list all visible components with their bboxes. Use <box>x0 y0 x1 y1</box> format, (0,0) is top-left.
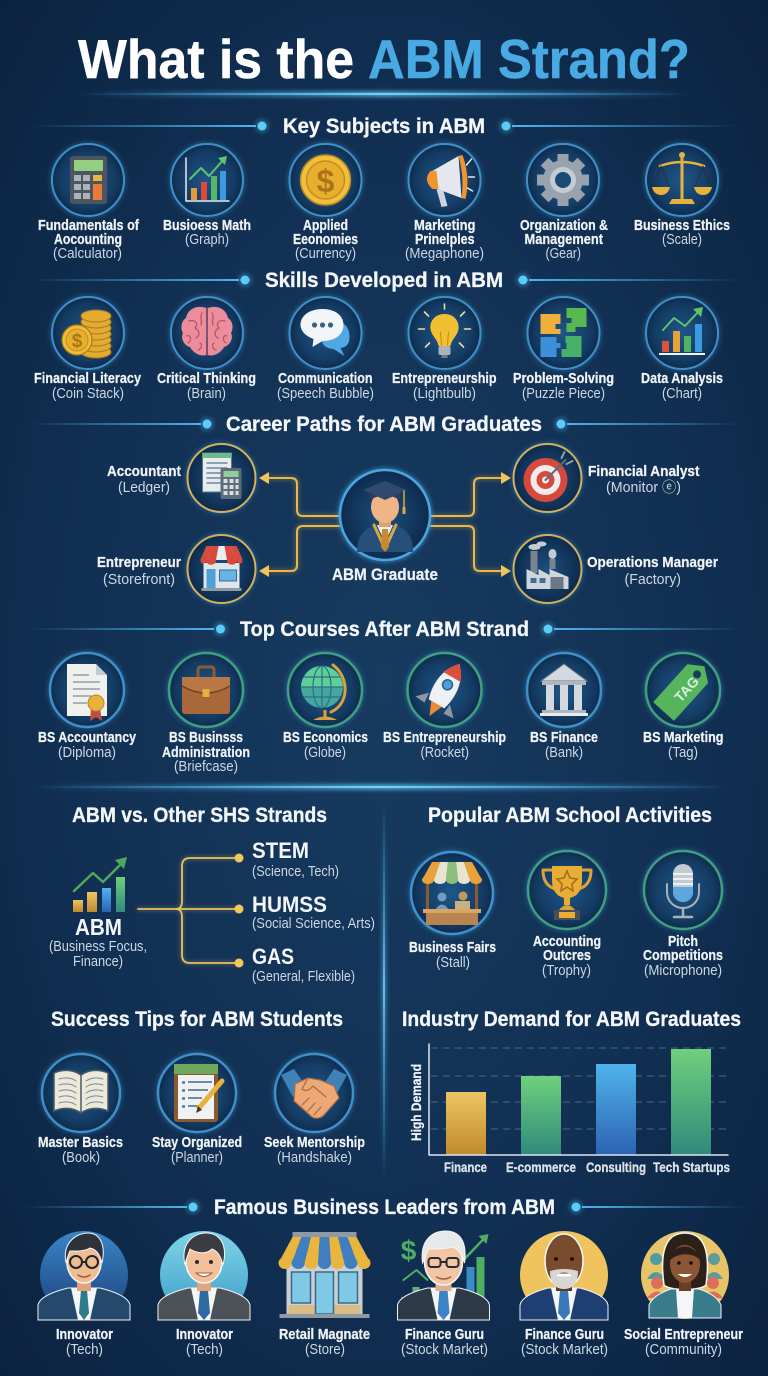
activity: Business Fairs <box>409 852 496 971</box>
label: (Ledger) <box>118 479 170 496</box>
icon: ABM growth chart <box>73 857 127 912</box>
icon: factory <box>514 535 582 603</box>
icon: book <box>42 1054 120 1132</box>
title: What is the <box>78 28 354 90</box>
label: Business Ethics <box>634 217 730 234</box>
icon: megaphone <box>408 144 480 216</box>
icon: trophy <box>528 851 606 929</box>
icon: chart <box>646 297 718 369</box>
label: Prinelples <box>415 231 474 248</box>
bar: Consulting <box>596 1064 636 1155</box>
tip: Master Basics <box>38 1054 123 1166</box>
label <box>624 1326 743 1358</box>
panel: Industry Demand for ABM Graduates <box>402 1008 741 1175</box>
label: BS Marketing <box>643 729 724 746</box>
x axis labels: Tech Startups <box>653 1159 730 1175</box>
label: Stay Organized <box>152 1134 242 1151</box>
portrait <box>641 1231 729 1319</box>
label <box>38 1134 123 1166</box>
activity: Pitch Competitions <box>643 851 723 979</box>
icon: currency coin: $ <box>317 163 335 199</box>
label: (Brain) <box>187 385 226 402</box>
course: BS Entrepreneurship <box>383 653 506 761</box>
leader: Finance Guru 1 <box>398 1231 490 1358</box>
label <box>38 217 140 262</box>
title <box>78 28 690 90</box>
label <box>383 729 506 761</box>
skill: Data Analysis <box>641 297 723 402</box>
label: (Currency) <box>295 245 356 262</box>
label: Accounting <box>533 933 601 950</box>
label: (Megaphone) <box>405 245 484 262</box>
label: (Factory) <box>624 571 681 588</box>
icon: diploma <box>50 653 124 727</box>
label: Operations Manager <box>587 554 718 571</box>
y axis label: High Demand <box>408 1064 424 1141</box>
label: (Diploma) <box>58 744 116 761</box>
icon: coin stack: $ <box>72 331 83 352</box>
icon: target <box>514 444 582 512</box>
label: (Scale) <box>662 231 702 248</box>
panel: ABM vs Other SHS Strands <box>49 804 375 985</box>
label: Accountant <box>107 463 181 480</box>
label <box>107 463 181 496</box>
label: (Briefcase) <box>174 758 238 775</box>
title: ABM Strand? <box>368 28 690 90</box>
label <box>530 729 598 761</box>
label <box>521 1326 608 1358</box>
icon: handshake <box>275 1054 353 1132</box>
label: Social Entrepreneur <box>624 1326 743 1343</box>
label: (Coin Stack) <box>52 385 124 402</box>
portrait <box>520 1231 608 1320</box>
label: (Globe) <box>304 744 346 761</box>
label: Administration <box>162 744 250 761</box>
label: Business Fairs <box>409 939 496 956</box>
icon: briefcase <box>169 653 243 727</box>
strand: GAS <box>252 944 355 985</box>
label <box>392 370 496 402</box>
label: (Microphone) <box>644 962 722 979</box>
label: Finance Guru <box>525 1326 604 1343</box>
icon: globe <box>288 653 362 727</box>
label: Marketing <box>414 217 476 234</box>
section header: Top Courses After ABM Strand: Top Courses After ABM Strand <box>240 618 529 641</box>
icon: calculator <box>52 144 124 216</box>
section header: Career Paths for ABM Graduates <box>30 413 740 436</box>
label <box>409 939 496 971</box>
strand: HUMSS <box>252 892 375 932</box>
heading: ABM vs. Other SHS Strands <box>72 804 327 827</box>
section header: Career Paths for ABM Graduates: Career Paths for ABM Graduates <box>226 413 542 436</box>
leader: Innovator 1 <box>38 1231 130 1358</box>
label: Entrepreneurship <box>392 370 496 387</box>
label: Organization & <box>520 217 608 234</box>
tip: Seek Mentorship <box>264 1054 365 1166</box>
label: (Planner) <box>171 1149 223 1166</box>
label: (Rocket) <box>420 744 469 761</box>
section header: Famous Business Leaders from ABM: Famous Business Leaders from ABM <box>214 1196 555 1219</box>
label: (Calculator) <box>53 245 122 262</box>
label <box>643 729 724 761</box>
career: Accountant <box>107 444 256 512</box>
icon: ledger <box>188 444 256 512</box>
tip: Stay Organized <box>152 1054 242 1166</box>
section header: Skills Developed in ABM <box>30 269 740 292</box>
label <box>293 217 358 262</box>
strand: STEM: (Science, Tech) <box>252 863 339 880</box>
ABM text: (Business Focus, <box>49 938 147 955</box>
label: Entrepreneur <box>97 554 181 571</box>
subject: Fundamentals of Accounting <box>38 144 140 262</box>
label: (Gear) <box>546 245 581 262</box>
icon: brain <box>171 297 243 369</box>
activity: Accounting Outcres <box>528 851 606 979</box>
label: (Tech) <box>66 1341 103 1358</box>
label <box>157 370 256 402</box>
x axis labels: Consulting <box>586 1159 646 1175</box>
career: Financial Analyst <box>514 444 700 512</box>
course: BS Accountancy <box>38 653 137 761</box>
label <box>513 370 614 402</box>
label <box>97 554 181 588</box>
label: Applied <box>303 217 348 234</box>
label: Master Basics <box>38 1134 123 1151</box>
label: Innovator <box>176 1326 233 1343</box>
icon: store <box>278 1232 370 1318</box>
label: Data Analysis <box>641 370 723 387</box>
label: BS Entrepreneurship <box>383 729 506 746</box>
label <box>520 217 608 262</box>
label: Financial Literacy <box>34 370 142 387</box>
skill: Communication <box>277 297 374 402</box>
skill: Entrepreneurship <box>392 297 496 402</box>
strand: GAS: GAS <box>252 944 294 969</box>
label <box>283 729 368 761</box>
label: Fundamentals of <box>38 217 140 234</box>
icon: lightbulb <box>408 297 480 369</box>
label: BS Accountancy <box>38 729 137 746</box>
subject: Business Ethics <box>634 144 730 248</box>
label <box>277 370 374 402</box>
ABM text <box>49 914 147 970</box>
section header: Key Subjects in ABM <box>30 115 740 138</box>
label: ABM Graduate <box>332 565 438 584</box>
icon: puzzle piece <box>528 297 600 369</box>
icon: speech bubble <box>290 297 362 369</box>
branching connector <box>138 854 244 968</box>
career: Operations Manager <box>514 535 718 603</box>
skill: Critical Thinking <box>157 297 256 402</box>
leader: Retail Magnate <box>278 1232 370 1358</box>
label: (Handshake) <box>277 1149 352 1166</box>
career center: ABM Graduate <box>332 468 438 584</box>
label: (Book) <box>62 1149 100 1166</box>
label: (Trophy) <box>542 962 591 979</box>
label <box>643 933 723 979</box>
section header: Key Subjects in ABM: Key Subjects in ABM <box>283 115 485 138</box>
career connectors <box>259 472 511 577</box>
label: Critical Thinking <box>157 370 256 387</box>
label: (Stock Market) <box>521 1341 608 1358</box>
label: Outcres <box>543 947 591 964</box>
label: Finance Guru <box>405 1326 484 1343</box>
label: Retail Magnate <box>279 1326 370 1343</box>
icon: microphone <box>644 851 722 929</box>
label <box>152 1134 242 1166</box>
label: BS Finance <box>530 729 598 746</box>
portrait <box>158 1231 250 1320</box>
label <box>38 729 137 761</box>
subject: Business Math <box>163 144 251 248</box>
label <box>56 1326 113 1358</box>
label <box>588 463 700 496</box>
course: BS Finance <box>527 653 601 761</box>
portrait: $ <box>401 1235 417 1266</box>
strand: GAS: (General, Flexible) <box>252 968 355 985</box>
portrait <box>38 1231 130 1320</box>
label: (Puzzle Piece) <box>522 385 605 402</box>
icon: scale <box>646 144 718 216</box>
course: BS Marketing <box>643 653 724 761</box>
leader: Innovator 2 <box>158 1231 250 1358</box>
label <box>176 1326 233 1358</box>
section header: Famous Business Leaders from ABM <box>25 1196 745 1219</box>
skill: Problem-Solving <box>513 297 614 402</box>
icon: storefront <box>188 535 256 603</box>
label: (Speech Bubble) <box>277 385 374 402</box>
label: Financial Analyst <box>588 463 700 480</box>
course: BS Business Administration <box>162 653 250 775</box>
icon: tag: TAG <box>671 673 702 705</box>
ABM text: ABM <box>75 914 122 940</box>
label: (Chart) <box>662 385 702 402</box>
label <box>163 217 251 248</box>
section header: Skills Developed in ABM: Skills Developed in ABM <box>265 269 503 292</box>
subject: Marketing Principles <box>405 144 484 262</box>
bar: E-commerce <box>521 1076 561 1155</box>
label <box>405 217 484 262</box>
label: Competitions <box>643 947 723 964</box>
icon: gear <box>527 144 599 216</box>
label: (Store) <box>305 1341 345 1358</box>
label: Communication <box>278 370 372 387</box>
label: Pitch <box>668 933 698 950</box>
skill: Financial Literacy <box>34 297 142 402</box>
x axis labels <box>444 1159 730 1175</box>
label <box>279 1326 370 1358</box>
career: Entrepreneur <box>97 535 256 603</box>
icon: bank <box>527 653 601 727</box>
icon: stall <box>411 852 493 934</box>
label: (Bank) <box>545 744 583 761</box>
heading: Success Tips for ABM Students <box>51 1008 343 1031</box>
label <box>641 370 723 402</box>
ABM text: Finance) <box>73 953 123 970</box>
strand: STEM: STEM <box>252 838 309 863</box>
subject: Organization and Management <box>520 144 608 262</box>
section header: Top Courses After ABM Strand <box>30 618 740 641</box>
label <box>533 933 601 979</box>
label <box>634 217 730 248</box>
label: (Stall) <box>436 954 470 971</box>
label: (Lightbulb) <box>413 385 476 402</box>
label <box>162 729 250 775</box>
horizontal divider <box>30 785 730 789</box>
label: (Tag) <box>668 744 698 761</box>
label: (Storefront) <box>103 571 175 588</box>
icon: graduate <box>338 468 432 562</box>
label: (Community) <box>645 1341 722 1358</box>
label: Aocounting <box>54 231 122 248</box>
vertical divider <box>382 800 386 1180</box>
label: (Graph) <box>185 231 229 248</box>
label <box>34 370 142 402</box>
panel: Success Tips for ABM Students <box>38 1008 365 1166</box>
course: BS Economics <box>283 653 368 761</box>
icon: rocket <box>408 653 482 727</box>
label <box>587 554 718 588</box>
x axis labels: Finance <box>444 1159 487 1175</box>
label: Busioess Math <box>163 217 251 234</box>
label: Innovator <box>56 1326 113 1343</box>
label: (Tech) <box>186 1341 223 1358</box>
strand: HUMSS: HUMSS <box>252 892 327 917</box>
heading: Popular ABM School Activities <box>428 804 712 827</box>
label: Seek Mentorship <box>264 1134 365 1151</box>
strand: STEM <box>252 838 339 880</box>
bar: Tech Startups <box>671 1049 711 1155</box>
label: BS Economics <box>283 729 368 746</box>
bar chart <box>408 1044 730 1175</box>
label: Eeonomies <box>293 231 358 248</box>
label: Problem-Solving <box>513 370 614 387</box>
icon: graph <box>171 144 243 216</box>
leader: Finance Guru 2 <box>520 1231 608 1358</box>
label: Management <box>524 231 603 248</box>
bar: Finance <box>446 1092 486 1155</box>
label <box>264 1134 365 1166</box>
heading: Industry Demand for ABM Graduates <box>402 1008 741 1031</box>
leader: Social Entrepreneur <box>624 1231 743 1358</box>
label: BS Businsss <box>169 729 243 746</box>
strand: HUMSS: (Social Science, Arts) <box>252 915 375 932</box>
x axis labels: E-commerce <box>506 1159 576 1175</box>
label: (Monitor ⓔ) <box>606 479 681 496</box>
title divider <box>78 92 690 96</box>
icon: planner <box>158 1054 236 1132</box>
label <box>401 1326 488 1358</box>
label: (Stock Market) <box>401 1341 488 1358</box>
panel: Popular ABM School Activities <box>409 804 723 979</box>
subject: Applied Economics <box>290 144 362 262</box>
